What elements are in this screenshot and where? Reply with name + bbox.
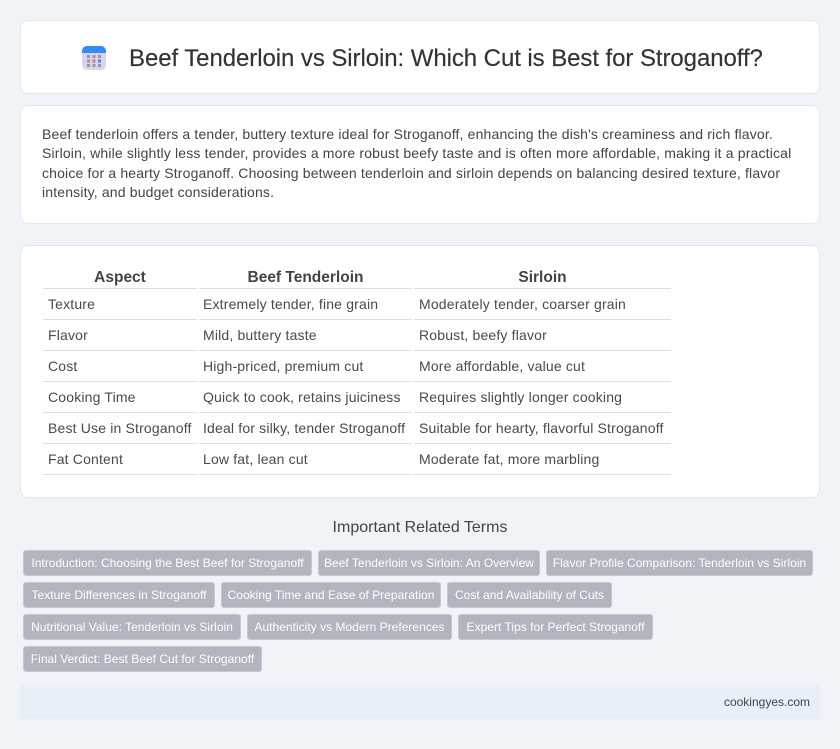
row: fat content: Fat Content bbox=[48, 451, 123, 467]
panel: comparison table bbox=[20, 245, 820, 498]
table: comparison bbox=[43, 269, 671, 475]
tag: Cooking Time and Ease of Preparation bbox=[228, 588, 434, 602]
tag: Texture Differences in Stroganoff bbox=[32, 588, 206, 602]
row: flavor bbox=[48, 327, 547, 343]
row: best use in stroganoff: Ideal for silky, tender Stroganoff bbox=[203, 420, 405, 436]
tag bbox=[447, 582, 612, 608]
tag bbox=[23, 550, 312, 576]
tag: Flavor Profile Comparison: Tenderloin vs Sirloin bbox=[553, 556, 806, 570]
footer text: cookingyes.com bbox=[724, 695, 810, 709]
text block: description: choice for a hearty Stroganoff. Choosing between tenderloin and sirloin depends on balancing desired texture, flavor bbox=[42, 165, 780, 181]
column heading: sirloin: Sirloin bbox=[518, 269, 567, 286]
text block: description: Beef tenderloin offers a tender, buttery texture ideal for Stroganoff, enhancing the dish's creaminess and rich flavor. bbox=[42, 126, 773, 142]
column heading: beef tenderloin: Beef Tenderloin bbox=[248, 269, 363, 286]
tag bbox=[318, 550, 540, 576]
row: best use in stroganoff: Suitable for hearty, flavorful Stroganoff bbox=[419, 420, 664, 436]
tag: Final Verdict: Best Beef Cut for Stroganoff bbox=[31, 652, 254, 666]
row: cost: More affordable, value cut bbox=[419, 358, 585, 374]
row: texture: Extremely tender, fine grain bbox=[203, 296, 378, 312]
row: texture: Texture bbox=[48, 296, 95, 312]
text block: description: intensity, and budget considerations. bbox=[42, 184, 274, 200]
tag: Authenticity vs Modern Preferences bbox=[254, 620, 445, 634]
text block: description bbox=[42, 126, 791, 200]
row: cost bbox=[48, 358, 585, 374]
row: texture: Moderately tender, coarser grain bbox=[419, 296, 626, 312]
row: cost: Cost bbox=[48, 358, 77, 374]
tag bbox=[458, 614, 653, 640]
panel: description bbox=[20, 105, 820, 224]
row: cooking time: Requires slightly longer cooking bbox=[419, 389, 622, 405]
tag list: related terms bbox=[23, 550, 813, 672]
tag bbox=[23, 646, 262, 672]
tag: Expert Tips for Perfect Stroganoff bbox=[467, 620, 644, 634]
tag bbox=[247, 614, 452, 640]
row: fat content: Low fat, lean cut bbox=[203, 451, 308, 467]
row: cooking time: Cooking Time bbox=[48, 389, 136, 405]
row: cost: High-priced, premium cut bbox=[203, 358, 363, 374]
row: best use in stroganoff: Best Use in Stroganoff bbox=[48, 420, 192, 436]
row: flavor: Flavor bbox=[48, 327, 88, 343]
tag bbox=[23, 614, 241, 640]
row: flavor: Robust, beefy flavor bbox=[419, 327, 547, 343]
heading: important related terms: Important Related Terms bbox=[333, 519, 507, 536]
icon: calendar bbox=[82, 46, 106, 70]
row: fat content bbox=[48, 451, 599, 467]
tag bbox=[23, 582, 215, 608]
tag: Beef Tenderloin vs Sirloin: An Overview bbox=[324, 556, 534, 570]
footer bar bbox=[20, 685, 820, 719]
tag bbox=[546, 550, 813, 576]
column heading: aspect: Aspect bbox=[94, 269, 146, 286]
tag bbox=[221, 582, 441, 608]
panel: header bbox=[20, 20, 820, 94]
row: cooking time: Quick to cook, retains juiciness bbox=[203, 389, 401, 405]
row: texture bbox=[48, 296, 626, 312]
tag: Nutritional Value: Tenderloin vs Sirloin bbox=[31, 620, 233, 634]
row: best use in stroganoff bbox=[48, 420, 664, 436]
row: fat content: Moderate fat, more marbling bbox=[419, 451, 599, 467]
title: Beef Tenderloin vs Sirloin: Which Cut is Best for Stroganoff? bbox=[129, 45, 763, 72]
text block: description: Sirloin, while slightly less tender, provides a more robust beefy taste and is often more affordable, making it a practical bbox=[42, 145, 791, 161]
tag: Cost and Availability of Cuts bbox=[455, 588, 604, 602]
row: flavor: Mild, buttery taste bbox=[203, 327, 317, 343]
tag: Introduction: Choosing the Best Beef for Stroganoff bbox=[31, 556, 304, 570]
row: cooking time bbox=[48, 389, 622, 405]
